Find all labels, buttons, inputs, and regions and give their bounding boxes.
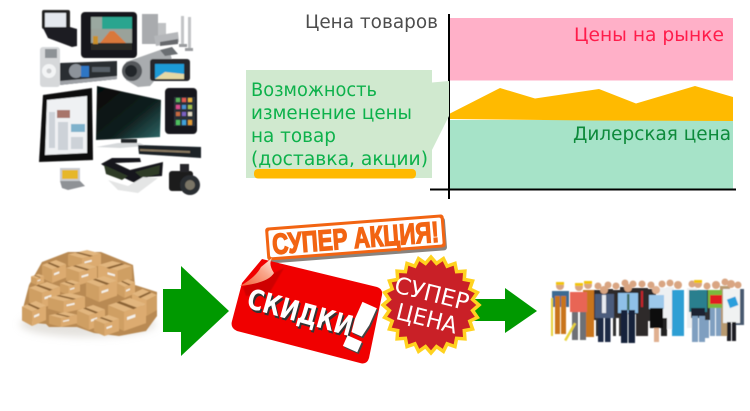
text: price: ЦЕНА: [393, 299, 460, 340]
text: discounts: СКИДКИ: [245, 285, 358, 345]
axis label: product price: Цена товаров: [305, 12, 438, 33]
sticker: discounts: [232, 258, 395, 374]
badge: super price: [383, 257, 479, 353]
icon: camcorder: [122, 47, 190, 87]
arrow: promotions to customers: [470, 288, 537, 333]
back row: [593, 278, 744, 338]
text: callout lines: (доставка, акции): [251, 149, 428, 170]
icon: DVD player: [138, 145, 201, 158]
photo: consumer electronics collage: [39, 10, 201, 195]
nurse: [672, 281, 684, 336]
label: dealer price: Дилерская цена: [573, 124, 731, 145]
band: dealer price: [450, 120, 733, 189]
icon: flat screen television: [96, 86, 161, 148]
icon: tablet: [39, 88, 93, 162]
woman in black skirt: [649, 286, 664, 342]
panel: price chart: [430, 14, 736, 199]
woman in green: [708, 281, 722, 336]
icon: slider phone: [42, 10, 77, 47]
worker in orange: [583, 281, 594, 337]
page curl: [240, 258, 274, 286]
worker in red shirt: [564, 283, 587, 341]
text: callout lines: изменение цены: [251, 103, 412, 124]
icon: small laptop: [60, 168, 85, 190]
text: super: СУПЕР: [392, 273, 472, 316]
banner: super promotion: [265, 214, 447, 264]
icon: music player: [40, 47, 60, 87]
icon: DSLR camera: [169, 164, 200, 195]
text: callout lines: на товар: [251, 126, 336, 147]
man in blue shirt: [618, 284, 638, 343]
icon: car radio: [60, 61, 117, 85]
highlight underline: [254, 169, 416, 178]
worker in overalls: [551, 282, 569, 336]
worker in teal: [689, 280, 707, 342]
arrow: boxes to promotions: [163, 266, 229, 356]
area: price margin: [449, 86, 733, 121]
icon: home theatre system: [142, 14, 193, 51]
text: exclamation mark: !: [326, 287, 395, 374]
label: market prices: Цены на рынке: [574, 25, 724, 46]
callout: price change opportunity: [246, 70, 449, 178]
band: market prices: [450, 18, 733, 80]
icon: GPS navigator: [81, 12, 137, 58]
icon: 3D glasses: [101, 158, 163, 193]
text: callout lines: Возможность: [251, 80, 377, 101]
axes: [430, 14, 736, 199]
photo: group of customers: [551, 278, 744, 343]
icon: smartphone: [165, 88, 197, 134]
text: super promotion: СУПЕР АКЦИЯ!: [271, 217, 440, 261]
photo: pile of cardboard boxes: [20, 250, 157, 337]
text: discounts: СКИДКИ: [244, 282, 357, 343]
doctor with folder: [723, 280, 740, 341]
text: callout lines: [251, 80, 428, 170]
man in grey suit: [595, 286, 614, 342]
text: exclamation mark: !: [325, 285, 393, 372]
